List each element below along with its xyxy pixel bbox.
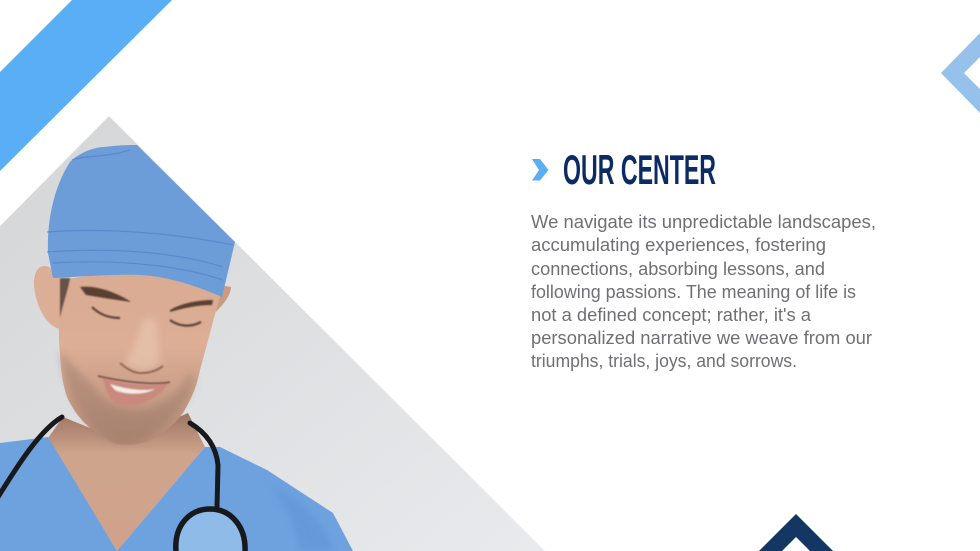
stubble shading xyxy=(60,350,194,444)
mouth xyxy=(98,376,170,406)
body text block: connections, absorbing lessons, and xyxy=(531,259,825,279)
body text block: triumphs, trials, joys, and sorrows. xyxy=(531,351,797,371)
body text block: We navigate its unpredictable landscapes, xyxy=(531,212,876,232)
stethoscope tubes xyxy=(0,417,218,507)
eyebrows xyxy=(80,287,213,312)
body text block: following passions. The meaning of life is xyxy=(531,282,856,302)
photo panel: doctor in diamond crop xyxy=(0,116,545,551)
photo background xyxy=(0,116,545,551)
scrubs xyxy=(0,437,353,551)
eyes xyxy=(92,307,201,326)
chevron: top right xyxy=(941,33,980,113)
body text block xyxy=(531,212,876,371)
chevron: bottom xyxy=(759,514,833,551)
body text block: accumulating experiences, fostering xyxy=(531,235,826,255)
decorative diagonal band: top left xyxy=(0,0,172,171)
left ear xyxy=(34,266,62,329)
heading: OUR CENTER xyxy=(563,146,716,193)
body text block: personalized narrative we weave from our xyxy=(531,328,872,348)
face xyxy=(59,268,222,445)
section header xyxy=(532,146,716,193)
nose highlight xyxy=(125,318,160,370)
stethoscope ring xyxy=(176,509,245,551)
cap folds xyxy=(47,150,233,280)
temple hair xyxy=(60,278,70,318)
nose shadow xyxy=(120,363,163,373)
neck xyxy=(48,413,205,551)
surgical cap xyxy=(47,145,235,297)
scrubs shading xyxy=(282,496,328,548)
body text block: not a defined concept; rather, it's a xyxy=(531,305,812,325)
right ear xyxy=(216,285,231,312)
icon: chevron bullet xyxy=(532,159,548,180)
